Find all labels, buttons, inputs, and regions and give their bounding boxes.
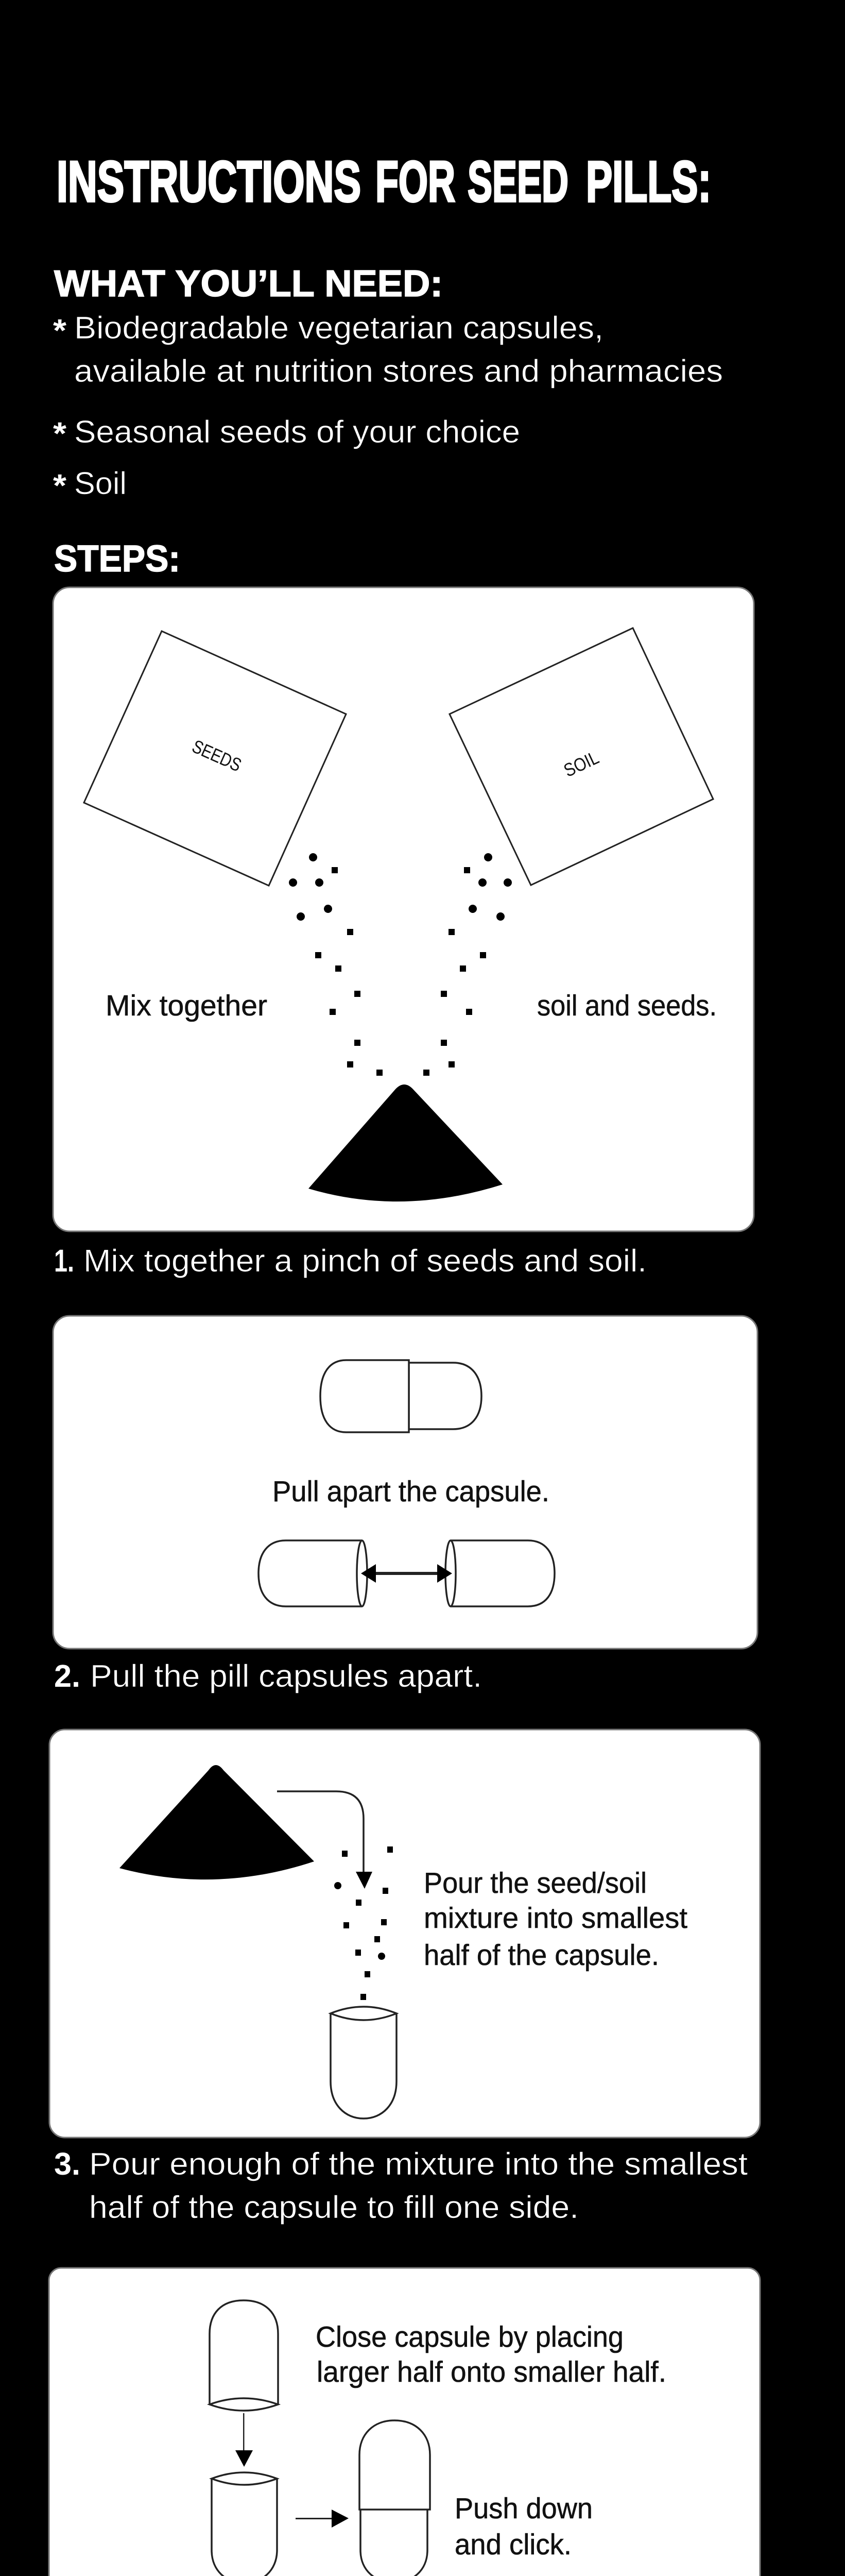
- title: PILLS:: [586, 149, 711, 214]
- label: soil and seeds: soil and seeds.: [537, 989, 717, 1022]
- panel: step 1 mix: [53, 587, 754, 1231]
- label: pour the mixture: mixture into smallest: [424, 1902, 687, 1935]
- list item: seeds: Seasonal seeds of your choice: [74, 414, 520, 449]
- label: pour the mixture: Pour the seed/soil: [424, 1867, 647, 1900]
- icon: assembled capsule: [359, 2420, 430, 2576]
- falling soil: right: [423, 853, 512, 1076]
- icon: mixed pile: [308, 1084, 503, 1201]
- icon: seeds packet: [84, 631, 346, 886]
- label: pour the mixture: half of the capsule.: [424, 1939, 659, 1972]
- icon: seeds packet: SEEDS: [189, 736, 245, 776]
- caption: step 3: Pour enough of the mixture into the smallest: [89, 2146, 748, 2181]
- caption: step 2: Pull the pill capsules apart.: [90, 1658, 482, 1693]
- list item: seeds: *: [53, 416, 66, 451]
- list item: capsules: Biodegradable vegetarian capsules,: [74, 310, 603, 345]
- arrow: pull double arrow: [361, 1564, 452, 1583]
- caption: step 3: [54, 2146, 748, 2225]
- label: close capsule: [316, 2320, 666, 2388]
- label: mix together: Mix together: [106, 989, 267, 1022]
- label: push down: and click.: [455, 2528, 572, 2561]
- falling seeds: left: [289, 853, 383, 1076]
- icon: left capsule half: [258, 1540, 367, 1606]
- panel: step 2 pull apart: [53, 1316, 757, 1649]
- list item: capsules: [53, 310, 723, 388]
- label: push down: Push down: [455, 2492, 593, 2525]
- label: close capsule: Close capsule by placing: [316, 2320, 624, 2353]
- list item: soil: [53, 466, 127, 503]
- list item: soil: Soil: [74, 466, 127, 501]
- label: close capsule: larger half onto smaller half.: [317, 2355, 666, 2388]
- heading: steps: STEPS:: [54, 538, 180, 580]
- icon: soil packet: [450, 628, 713, 885]
- arrow: pour: [277, 1791, 372, 1889]
- list item: capsules: *: [53, 313, 66, 348]
- arrow: right: [296, 2510, 349, 2528]
- panel: step 4 close: [49, 2268, 760, 2576]
- caption: step 3: 3.: [54, 2146, 80, 2181]
- icon: mixture pile: [119, 1765, 314, 1879]
- label: pull apart: Pull apart the capsule.: [272, 1475, 549, 1508]
- arrow: down: [235, 2413, 253, 2467]
- title: FOR: [375, 149, 455, 214]
- icon: closed capsule: [320, 1360, 481, 1432]
- caption: step 1: 1.: [54, 1243, 74, 1278]
- icon: smaller capsule half: [212, 2472, 277, 2576]
- icon: larger capsule half: [210, 2300, 278, 2411]
- label: pour the mixture: [424, 1867, 687, 1972]
- list item: capsules: available at nutrition stores and pharmacies: [74, 353, 723, 388]
- falling mixture: [334, 1846, 393, 2000]
- icon: right capsule half: [445, 1540, 555, 1606]
- icon: soil packet: SOIL: [560, 747, 602, 781]
- title: INSTRUCTIONS: [57, 149, 361, 214]
- label: push down: [455, 2492, 593, 2561]
- title: [57, 149, 711, 214]
- list: materials: [53, 310, 723, 503]
- list item: soil: *: [53, 468, 66, 503]
- caption: step 3: half of the capsule to fill one side.: [89, 2190, 579, 2225]
- title: SEED: [468, 149, 568, 214]
- caption: step 1: Mix together a pinch of seeds and soil.: [83, 1243, 647, 1278]
- caption: step 2: 2.: [54, 1658, 80, 1693]
- icon: open capsule half: [331, 2007, 396, 2119]
- panel: step 3 pour: [49, 1730, 760, 2138]
- heading: what you'll need: WHAT YOU’LL NEED:: [54, 263, 443, 304]
